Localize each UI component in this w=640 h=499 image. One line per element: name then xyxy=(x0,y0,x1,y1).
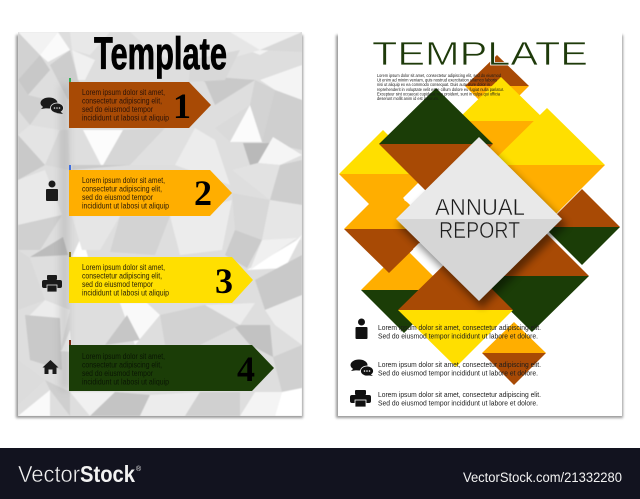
icon: person (left) xyxy=(46,180,58,201)
banner 1: Lorem ipsum dolor sit amet, xyxy=(82,88,165,97)
text: ANNUAL REPORT: REPORT xyxy=(439,217,520,243)
diamond: left yellow/orange xyxy=(339,130,427,218)
text block: intro paragraph: nisi ut aliquip ex ea commodo consequat. Duis aute irure dolor in xyxy=(377,82,490,88)
icon: printer (right) xyxy=(350,390,371,407)
diamond: left orange/brown xyxy=(344,184,434,273)
logo: VectorStock: Stock xyxy=(80,461,135,487)
text block: item three: Lorem ipsum dolor sit amet, consectetur adipiscing elit. xyxy=(378,390,541,399)
banner 1 xyxy=(69,78,211,128)
diamond: bottom brown/yellow xyxy=(398,253,513,367)
diamond: small bottom orange/brown xyxy=(482,322,546,385)
diamond: green/brown xyxy=(379,88,493,201)
text block: item two: Lorem ipsum dolor sit amet, consectetur adipiscing elit. xyxy=(378,360,541,369)
logo: VectorStock: Vector xyxy=(18,461,80,487)
panel: right brochure page xyxy=(336,32,623,418)
banner 4: Lorem ipsum dolor sit amet, xyxy=(82,352,165,361)
panel: left brochure page xyxy=(16,32,303,418)
text: image id: VectorStock.com/21332280 xyxy=(463,470,622,485)
banner 3 xyxy=(69,252,253,303)
shadow behind banners xyxy=(60,85,69,390)
text block: intro paragraph: Lorem ipsum dolor sit amet, consectetur adipiscing elit, sed do eiusmod xyxy=(377,73,501,79)
diamond cluster xyxy=(339,55,620,385)
low-poly background xyxy=(18,32,302,416)
white stripes behind centre xyxy=(404,186,443,273)
logo mark: registered: ® xyxy=(136,465,142,473)
text: ANNUAL REPORT: ANNUAL xyxy=(435,194,525,220)
text block: item one: Sed do eiusmod tempor incididunt ut labore et dolore. xyxy=(378,332,538,340)
footer bar xyxy=(0,448,640,499)
banner 2: sed do eiusmod tempor xyxy=(82,193,153,202)
icon: person (right) xyxy=(356,318,368,339)
title: TEMPLATE: TEMPLATE xyxy=(372,35,588,72)
diamond: lower right brown/green xyxy=(475,219,589,332)
banner 4: incididunt ut labosi ut aliquip xyxy=(82,378,170,386)
banner 1: sed do eiusmod tempor xyxy=(82,105,153,114)
centre diamond shadow xyxy=(398,142,567,308)
text block: intro paragraph: Excepteur sint occaecat cupidatat non proident, sunt in culpa qui officia xyxy=(377,92,500,98)
icon: chat bubbles (right) xyxy=(350,360,374,376)
banner 4 xyxy=(69,340,274,391)
banner 3: Lorem ipsum dolor sit amet, xyxy=(82,263,165,272)
diamond: right brown/green xyxy=(544,189,620,265)
icon: home (left) xyxy=(42,360,58,374)
icon: printer (left) xyxy=(42,275,62,292)
banner 3: 3 xyxy=(215,261,233,301)
text block: item three: Sed do eiusmod tempor incididunt ut labore et dolore. xyxy=(378,398,538,408)
text block: item two: Sed do eiusmod tempor incididunt ut labore et dolore. xyxy=(378,368,538,378)
banner 1: consectetur adipiscing elit, xyxy=(82,96,162,106)
banner 3: sed do eiusmod tempor xyxy=(82,280,153,289)
banner 3: consectetur adipiscing elit, xyxy=(82,272,162,280)
banner 2: 2 xyxy=(194,173,212,213)
diamond: small top brown/orange xyxy=(465,55,529,118)
text: ANNUAL REPORT xyxy=(435,194,525,243)
diamond: right yellow/orange xyxy=(489,108,605,223)
banner 2: incididunt ut labosi ut aliquip xyxy=(82,202,170,210)
banner 2: consectetur adipiscing elit, xyxy=(82,184,162,194)
diamond: upper yellow/orange xyxy=(456,77,546,166)
text block: item one: Lorem ipsum dolor sit amet, consectetur adipiscing elit. xyxy=(378,323,541,332)
diamond: lower left orange/green xyxy=(361,247,447,333)
banner 2: Lorem ipsum dolor sit amet, xyxy=(82,176,165,185)
banner 2 xyxy=(69,165,232,216)
banner 3: incididunt ut labosi ut aliquip xyxy=(82,288,170,298)
icon: chat bubbles (left) xyxy=(40,98,64,114)
banner 4: 4 xyxy=(237,349,255,389)
banner 1: incididunt ut labosi ut aliquip xyxy=(82,114,170,122)
text block: intro paragraph: Ut enim ad minim veniam, quis nostrud exercitation ullamco laboris xyxy=(377,78,498,84)
banner 4: sed do eiusmod tempor xyxy=(82,369,153,378)
title: Template: Template xyxy=(94,28,227,79)
banner 1: 1 xyxy=(173,86,191,126)
text block: intro paragraph: reprehenderit in voluptate velit esse cillum dolore eu fugiat nulla pariatur. xyxy=(377,87,504,93)
centre diamond xyxy=(396,137,562,301)
banner 4: consectetur adipiscing elit, xyxy=(82,360,162,370)
text block: intro paragraph: deserunt mollit anim id est laborum. xyxy=(377,96,439,102)
logo: VectorStock xyxy=(18,461,135,487)
